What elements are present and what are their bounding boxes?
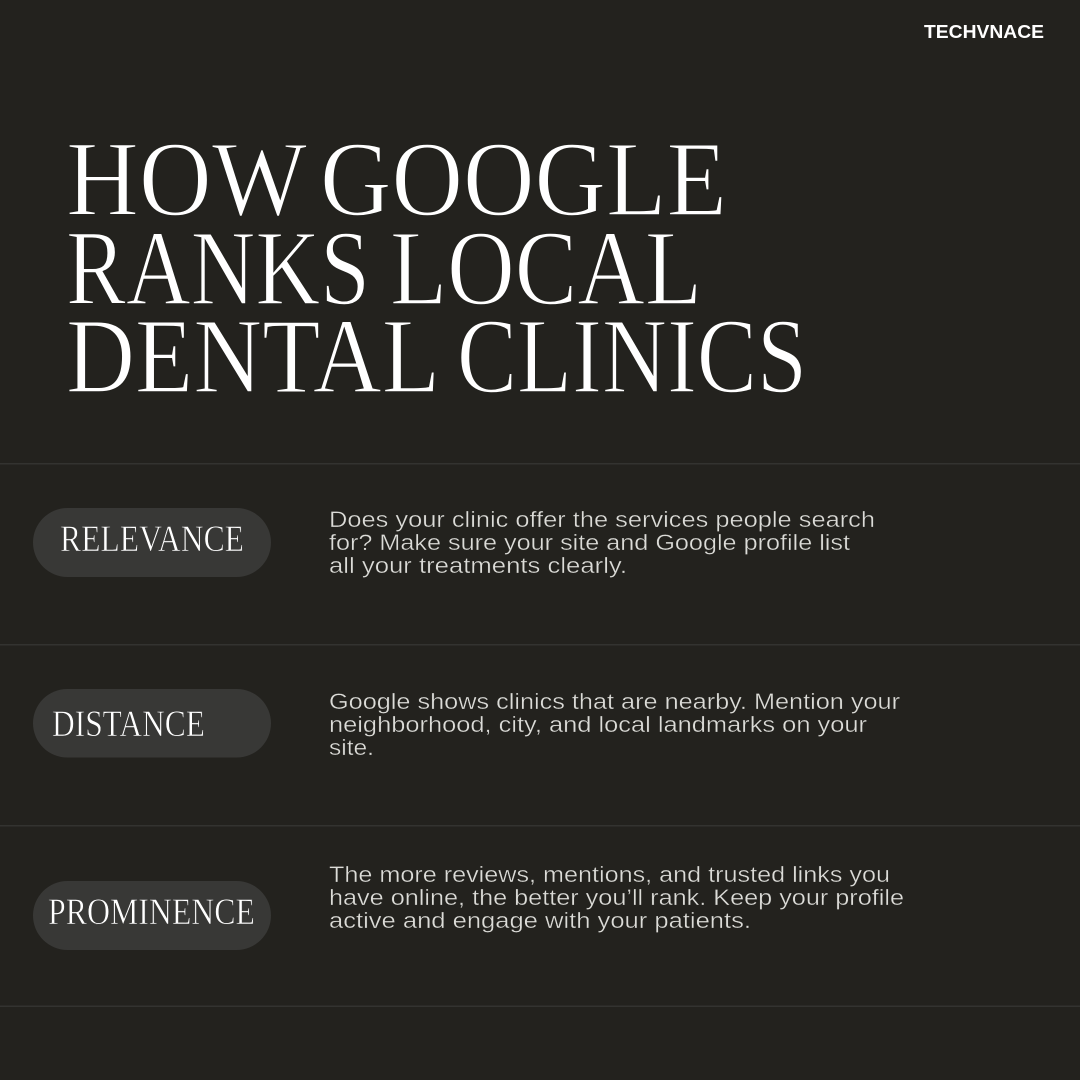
text: relevance description: Does your clinic offer the services people search	[329, 507, 875, 532]
text: relevance description	[329, 507, 875, 578]
text: prominence description	[329, 862, 904, 933]
pill: prominence	[33, 881, 271, 950]
text: prominence description: The more reviews, mentions, and trusted links you	[329, 862, 890, 887]
text: prominence description: active and engage with your patients.	[329, 908, 751, 933]
pill: prominence: PROMINENCE	[48, 892, 255, 933]
text: distance description	[329, 689, 900, 760]
title: RANKS	[66, 210, 370, 328]
text: distance description: neighborhood, city, and local landmarks on your	[329, 712, 867, 737]
panel: distance	[33, 689, 900, 760]
panel: relevance	[33, 507, 875, 578]
logo: Techvnace: TECHVNACE	[924, 22, 1044, 42]
title: DENTAL	[66, 298, 440, 416]
text: distance description: site.	[329, 735, 374, 760]
title: LOCAL	[390, 210, 702, 328]
panel: prominence	[33, 862, 904, 950]
pill: distance	[33, 689, 271, 758]
title: GOOGLE	[320, 121, 727, 239]
text: prominence description: have online, the better you’ll rank. Keep your profile	[329, 885, 904, 910]
pill: relevance: RELEVANCE	[60, 519, 244, 560]
title: HOW	[66, 121, 307, 239]
text: relevance description: all your treatments clearly.	[329, 553, 627, 578]
pill: distance: DISTANCE	[52, 704, 205, 745]
title: CLINICS	[457, 298, 807, 416]
pill: relevance	[33, 508, 271, 577]
title	[66, 121, 807, 416]
text: relevance description: for? Make sure your site and Google profile list	[329, 530, 850, 555]
text: distance description: Google shows clinics that are nearby. Mention your	[329, 689, 900, 714]
